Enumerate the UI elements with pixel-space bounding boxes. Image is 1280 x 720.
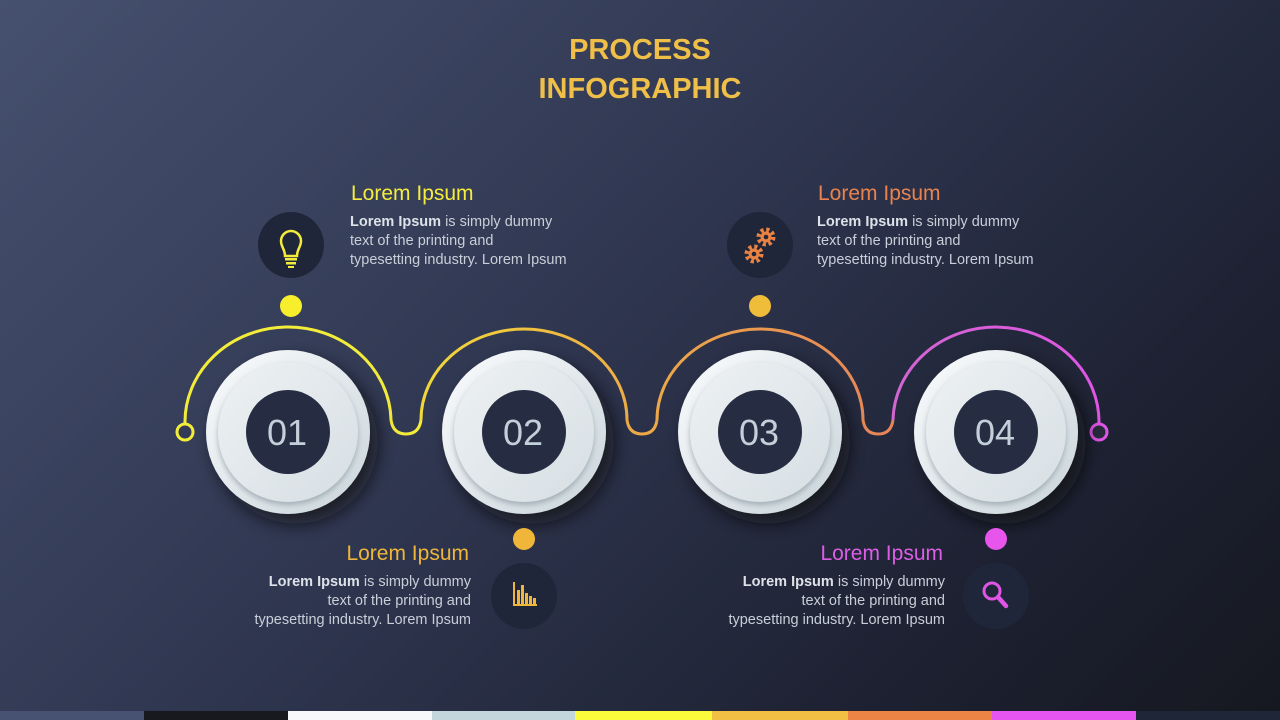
step circles: 03 [739, 412, 779, 453]
step 3 text: Lorem Ipsum is simply dummy [817, 214, 1019, 230]
icon: bulb [258, 212, 324, 278]
title [538, 34, 742, 105]
step 1 text [350, 214, 567, 268]
step 4 text [728, 574, 945, 628]
step 3 text: text of the printing and [817, 233, 960, 249]
step 2 text [254, 574, 471, 628]
icon: gears [727, 212, 793, 278]
title: INFOGRAPHIC [538, 73, 742, 105]
step circles [206, 350, 1078, 514]
step 4 title: Lorem Ipsum [820, 542, 943, 565]
step circles: 01 [267, 412, 307, 453]
step circles: 02 [503, 412, 543, 453]
wave line [177, 327, 1107, 440]
step 1 text: typesetting industry. Lorem Ipsum [350, 252, 567, 268]
step 3 title: Lorem Ipsum [818, 182, 941, 205]
step circles: 04 [975, 412, 1015, 453]
step 4 text: typesetting industry. Lorem Ipsum [728, 612, 945, 628]
step 3 text: typesetting industry. Lorem Ipsum [817, 252, 1034, 268]
icon: bar chart [491, 563, 557, 629]
step 2 text: typesetting industry. Lorem Ipsum [254, 612, 471, 628]
icon: search [963, 563, 1029, 629]
step 2 text: Lorem Ipsum is simply dummy [269, 574, 471, 590]
step 2 text: text of the printing and [328, 593, 471, 609]
step 1 text: text of the printing and [350, 233, 494, 249]
bottom colour bar [0, 711, 1280, 720]
step 4 text: text of the printing and [802, 593, 945, 609]
step 1 text: Lorem Ipsum is simply dummy [350, 214, 552, 230]
step 1 title: Lorem Ipsum [351, 182, 474, 205]
dots [280, 295, 1007, 550]
title: PROCESS [569, 34, 711, 66]
step 3 text [817, 214, 1034, 268]
step 2 title: Lorem Ipsum [346, 542, 469, 565]
step 4 text: Lorem Ipsum is simply dummy [743, 574, 945, 590]
